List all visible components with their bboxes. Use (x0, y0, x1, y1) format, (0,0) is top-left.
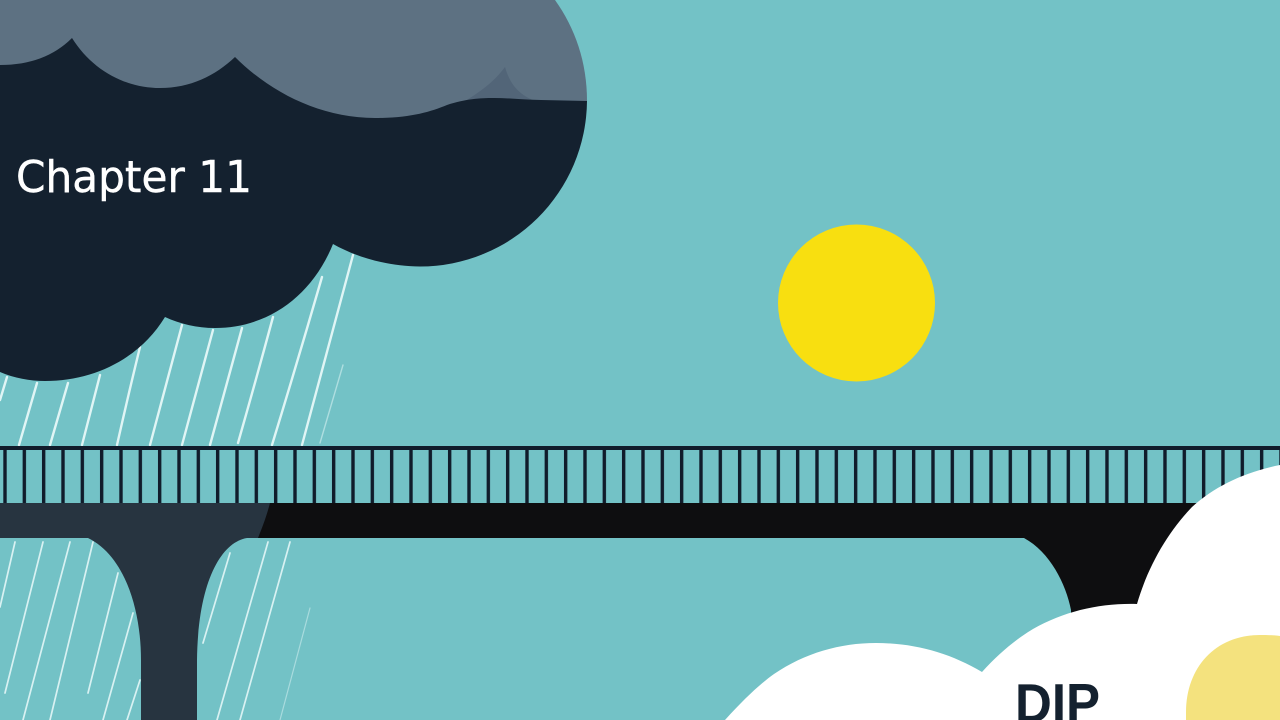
white cloud (725, 465, 1280, 720)
bridge top rail (0, 446, 1280, 450)
sun (778, 224, 935, 382)
shaded deck and left pier (0, 503, 270, 720)
storm cloud light upper part (0, 0, 587, 135)
rain streaks (0, 255, 353, 720)
bridge (0, 446, 1280, 720)
bridge railing balusters (0, 449, 1280, 503)
title: Chapter 11: Chapter 11 (16, 152, 252, 203)
storm cloud (0, 0, 587, 381)
small peak inside cloud (462, 67, 535, 103)
pale yellow sun (1186, 635, 1280, 720)
bridge deck and right pier (240, 503, 1280, 720)
DIP sunny cloud (725, 465, 1280, 720)
storm cloud dark lower part (0, 38, 587, 381)
